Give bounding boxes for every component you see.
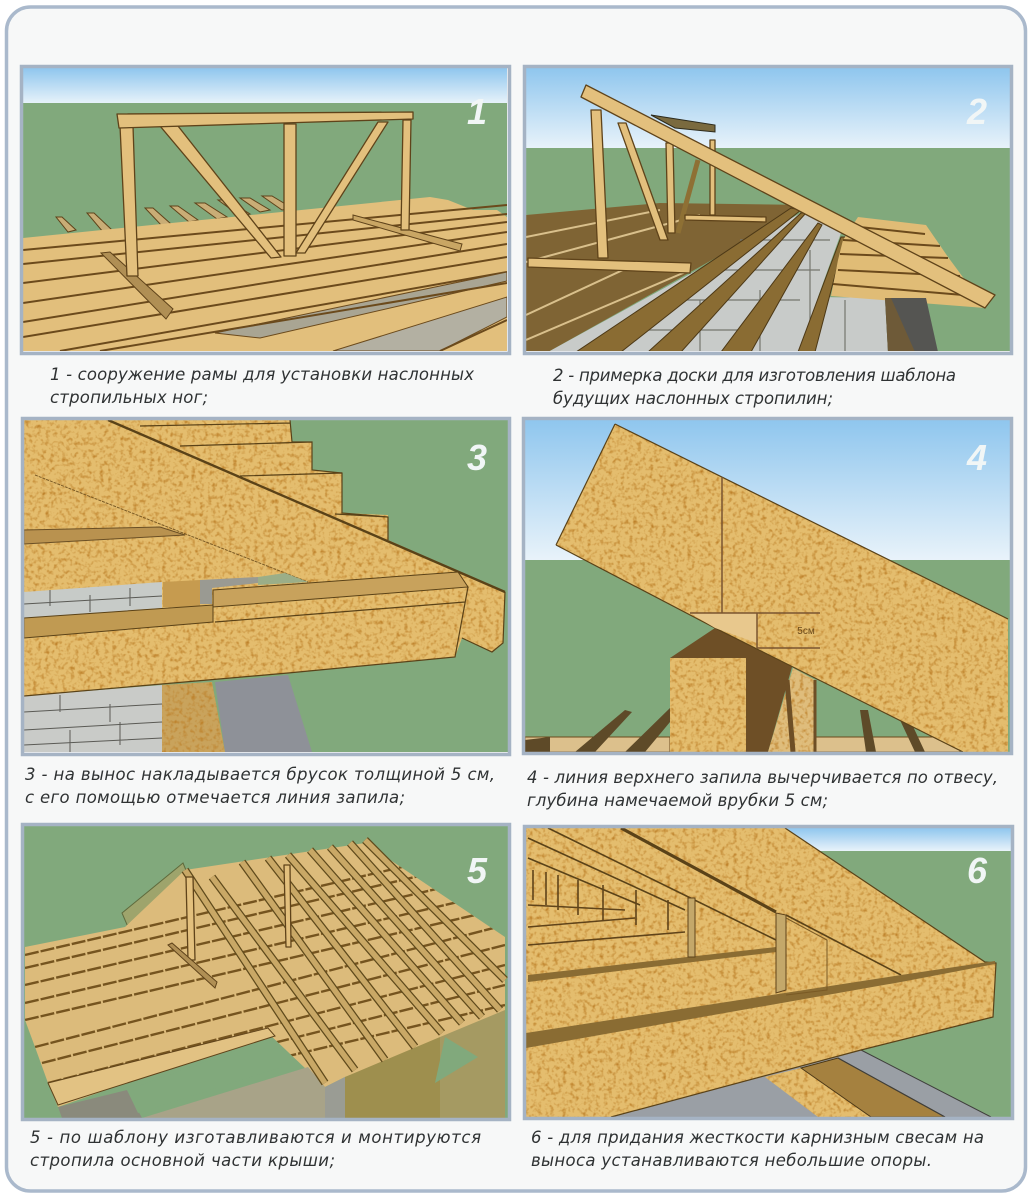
front post: [670, 658, 746, 752]
back frame: [122, 863, 190, 927]
main beam strip: [526, 961, 995, 1048]
caption 6: [531, 1128, 984, 1170]
masonry: [215, 272, 507, 338]
frame front: [591, 110, 675, 258]
ground under: [58, 1090, 142, 1118]
upper bricks: [24, 582, 162, 618]
dark roof of post: [670, 628, 792, 752]
frame posts: [120, 120, 411, 276]
caption 4: [527, 768, 998, 810]
panel 5: main rafters: [22, 824, 510, 1120]
osb mass: [526, 828, 996, 1117]
beam bar left: [24, 605, 213, 638]
ground gray: [611, 1050, 991, 1117]
rafter lines: [621, 828, 776, 912]
gray gap: [200, 577, 258, 604]
caption 1: стропильных ног;: [50, 388, 208, 407]
frame top beam: [117, 112, 413, 128]
caption 5: [30, 1128, 481, 1170]
wall: [885, 298, 938, 352]
caption 2: будущих наслонных стропилин;: [553, 389, 833, 408]
eave planks: [831, 217, 995, 308]
right batten: [353, 215, 462, 251]
left batten: [101, 252, 173, 319]
board: [556, 424, 1008, 752]
caption 6: 6 - для придания жесткости карнизным свесам на: [531, 1128, 984, 1147]
rafters: [185, 840, 505, 1083]
deck plank lines: [25, 866, 505, 1082]
bar dash: [24, 587, 468, 696]
panel 2: template board fitting: [524, 66, 1012, 354]
small post: [163, 580, 200, 607]
masonry: [548, 208, 888, 352]
panel 3: bar on overhang: [22, 418, 510, 754]
caption 2: 2 - примерка доски для изготовления шаблона: [553, 366, 956, 385]
right post: [768, 668, 815, 752]
gray wall: [215, 675, 312, 752]
courtyard: [127, 1043, 282, 1113]
distant studs: [528, 870, 685, 945]
left joist strip: [24, 527, 185, 544]
brick corner: [325, 1077, 345, 1118]
ridge posts: [186, 865, 291, 960]
panel 6: eave supports: [524, 826, 1012, 1118]
caption 6: выноса устанавливаются небольшие опоры.: [531, 1151, 932, 1170]
bottom joists: [525, 737, 960, 752]
caption 5: 5 - по шаблону изготавливаются и монтируются: [30, 1128, 481, 1147]
cut marks: [690, 477, 820, 648]
caption 2: [553, 366, 956, 408]
cut notch: [690, 613, 757, 643]
rafter lower line: [35, 475, 308, 582]
caption 3: с его помощью отмечается линия запила;: [25, 788, 405, 807]
number 2: 2: [966, 91, 987, 132]
floor joists: [23, 197, 507, 351]
beam bar right: [213, 572, 468, 607]
caption 1: 1 - сооружение рамы для установки наслонных: [50, 365, 474, 384]
number 3: 3: [467, 437, 487, 478]
brace dashed: [678, 160, 698, 233]
caption 3: [25, 765, 495, 807]
panel 4: top cut line: [524, 418, 1012, 754]
caption 4: 4 - линия верхнего запила вычерчивается по отвесу,: [527, 768, 998, 787]
number 6: 6: [967, 850, 988, 891]
joist ends: [56, 196, 292, 232]
gray plank lines: [838, 1050, 991, 1117]
number 1: 1: [467, 91, 487, 132]
upper beam strip: [528, 947, 776, 982]
osb strip under: [765, 1068, 871, 1117]
caption 1: [50, 365, 474, 407]
rafter edge: [108, 420, 505, 592]
batten: [168, 943, 217, 988]
dimension: 5см: [797, 626, 815, 637]
caption 5: стропила основной части крыши;: [30, 1151, 335, 1170]
caption 4: глубина намечаемой врубки 5 см;: [527, 791, 828, 810]
number 5: 5: [467, 850, 488, 891]
support right: [776, 913, 786, 993]
caption 3: 3 - на вынос накладывается брусок толщиной 5 см,: [25, 765, 495, 784]
support left: [688, 898, 695, 957]
osb mass: [24, 420, 505, 752]
step edges: [140, 420, 505, 652]
bottom planks: [48, 1028, 275, 1105]
frame braces: [160, 122, 388, 258]
outer edge: [611, 828, 996, 1117]
panel 1: frame construction: [22, 66, 510, 354]
template board: [581, 85, 995, 308]
deck planks: [25, 843, 505, 1107]
column: [162, 682, 225, 752]
wood plank under: [801, 1058, 945, 1117]
lower bricks: [24, 685, 162, 752]
brown deck: [526, 203, 810, 352]
joists: [576, 208, 845, 352]
frame back: [651, 115, 715, 132]
number 4: 4: [966, 437, 987, 478]
